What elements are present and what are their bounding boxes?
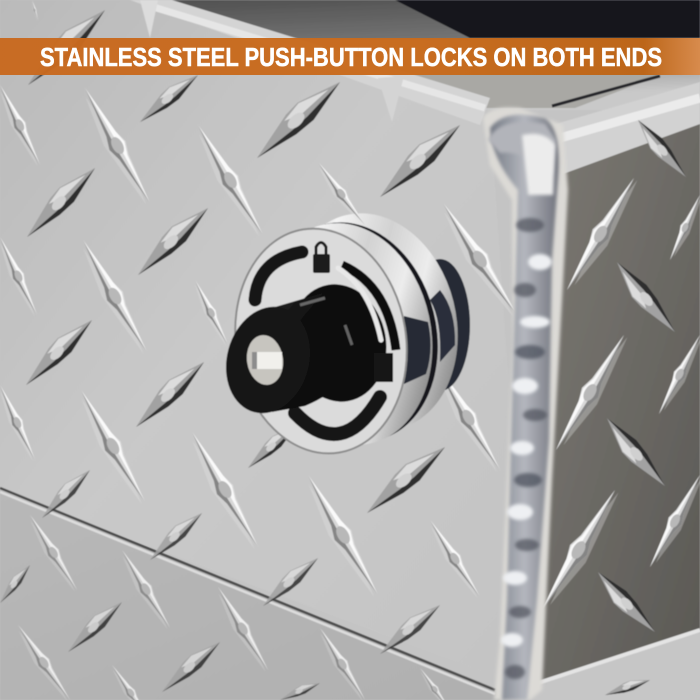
lower face treads (0, 464, 453, 700)
panel: right diamond plate face (535, 122, 700, 682)
top rail right (535, 82, 700, 174)
crease line (0, 488, 495, 690)
lock chrome collar (242, 207, 452, 461)
panel: right lower light area (530, 632, 700, 700)
lock faceplate (219, 216, 423, 466)
right face treads (534, 116, 700, 699)
lock rear nut (410, 259, 470, 391)
icon: push-button lock (214, 195, 480, 466)
weld top blob (488, 122, 556, 175)
weld seam (483, 107, 568, 700)
lock rear chrome ring (264, 195, 480, 449)
weld mottling (501, 218, 552, 679)
banner: orange strip (0, 38, 700, 75)
lock middle groove (244, 204, 460, 460)
key cylinder (244, 333, 286, 387)
panel: front diamond plate face (0, 0, 530, 690)
faceplate unlock icon (374, 353, 393, 382)
lock rear reflection (430, 290, 455, 362)
faceplate white slot (338, 268, 381, 340)
black knob face (214, 297, 322, 423)
faceplate padlock icon (313, 242, 330, 273)
weld halo (483, 107, 568, 700)
tread over lock top (312, 159, 369, 229)
black inner well (280, 277, 396, 409)
top rail left (130, 0, 490, 125)
faceplate black crescent (342, 265, 396, 350)
lock collar reflection (404, 316, 431, 384)
weld bead (490, 115, 559, 700)
background: dark upper area (0, 0, 700, 110)
panel: lower diamond plate face (0, 490, 500, 700)
faceplate black arcs (255, 252, 302, 300)
black knob barrel (258, 290, 360, 412)
knob highlight (300, 298, 352, 345)
front face treads (0, 0, 525, 601)
